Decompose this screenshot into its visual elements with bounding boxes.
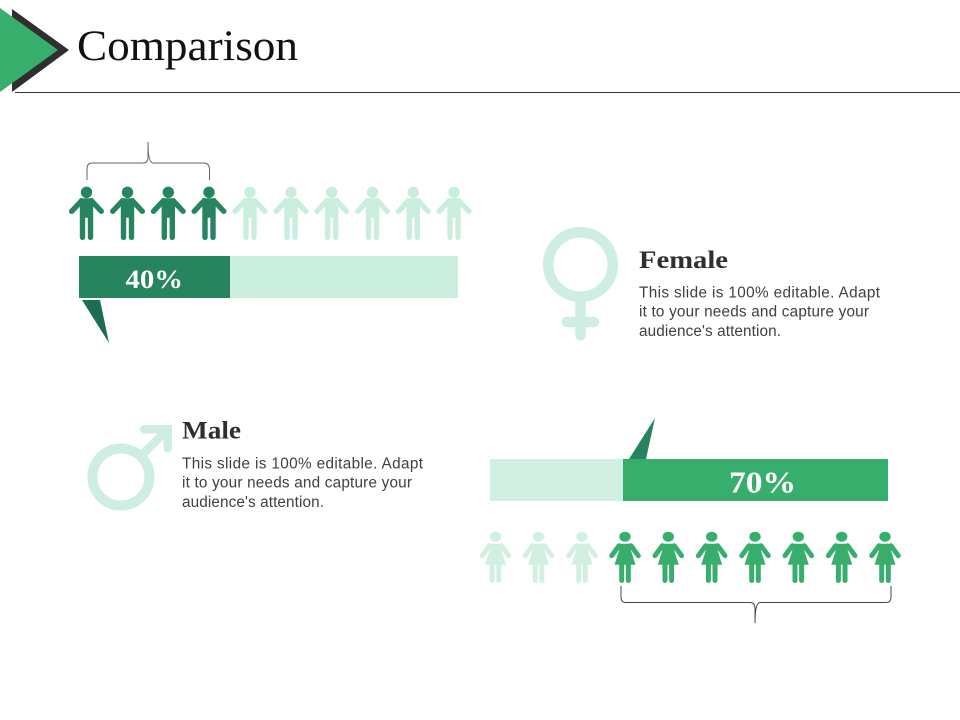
callout pointer — [629, 418, 655, 459]
text: female description: This slide is 100% editable. Adapt — [639, 284, 881, 302]
text: female description: it to your needs and capture your — [639, 304, 869, 320]
text: male description: This slide is 100% editable. Adapt — [182, 456, 424, 472]
icon: male symbol — [92, 429, 168, 506]
text: male description: it to your needs and capture your — [182, 474, 412, 492]
heading: Female: Female — [639, 247, 728, 274]
heading: Male: Male — [182, 418, 241, 444]
progress bar: 70%: 70% — [729, 464, 796, 500]
panel: female description — [548, 232, 885, 340]
progress bar: 40%: 40% — [126, 265, 183, 294]
text: male description: audience's attention. — [182, 494, 324, 511]
header arrow icon — [0, 8, 69, 92]
progress bar: 40% — [79, 256, 458, 298]
panel: female statistic — [482, 418, 898, 623]
female pictogram row — [482, 532, 898, 583]
header rule — [15, 92, 960, 93]
title: Comparison — [77, 23, 298, 70]
callout pointer — [82, 300, 109, 343]
bracket: bottom — [621, 586, 891, 623]
panel: male statistic — [72, 142, 469, 343]
male pictogram row — [72, 187, 469, 240]
text: female description: audience's attention. — [639, 323, 781, 340]
progress bar: 70% — [490, 459, 888, 501]
bracket: top — [87, 142, 210, 180]
icon: female symbol — [548, 232, 613, 336]
panel: male description — [92, 418, 428, 511]
